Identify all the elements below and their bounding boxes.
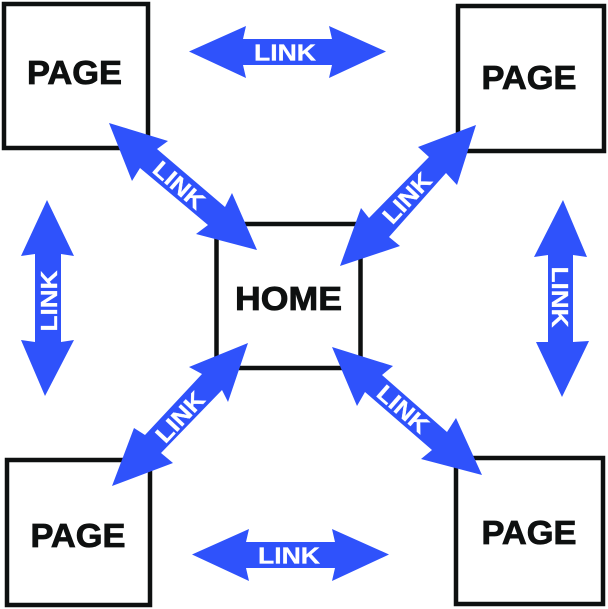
page box: top left: PAGE — [27, 54, 122, 91]
arrow: bottom left diagonal link: LINK — [150, 386, 210, 448]
page box: bottom right: PAGE — [482, 514, 576, 551]
arrow: right vertical link — [534, 200, 589, 397]
home box: HOME — [235, 280, 342, 317]
arrow: left vertical link — [21, 200, 74, 396]
arrow: bottom horizontal link — [192, 529, 389, 581]
page box: bottom left — [7, 460, 150, 605]
page box: top right: PAGE — [482, 59, 576, 96]
arrow: bottom horizontal link: LINK — [258, 542, 320, 568]
arrow: top left diagonal link — [109, 123, 257, 250]
arrow: top right diagonal link: LINK — [377, 167, 437, 229]
arrow: top left diagonal link: LINK — [148, 156, 210, 215]
page box: top left — [4, 4, 148, 148]
arrow: top right diagonal link — [340, 125, 476, 266]
page box: bottom right — [456, 458, 603, 604]
arrow: bottom left diagonal link — [112, 343, 248, 486]
arrow: bottom right diagonal link — [332, 347, 482, 475]
arrow: bottom right diagonal link: LINK — [372, 380, 434, 439]
arrow: top horizontal link — [189, 26, 386, 78]
arrow: right vertical link: LINK — [547, 266, 573, 328]
page box: bottom left: PAGE — [30, 517, 126, 554]
page box: top right — [458, 6, 604, 151]
arrow: left vertical link: LINK — [36, 270, 62, 332]
home box — [216, 224, 360, 368]
arrow: top horizontal link: LINK — [254, 40, 316, 66]
